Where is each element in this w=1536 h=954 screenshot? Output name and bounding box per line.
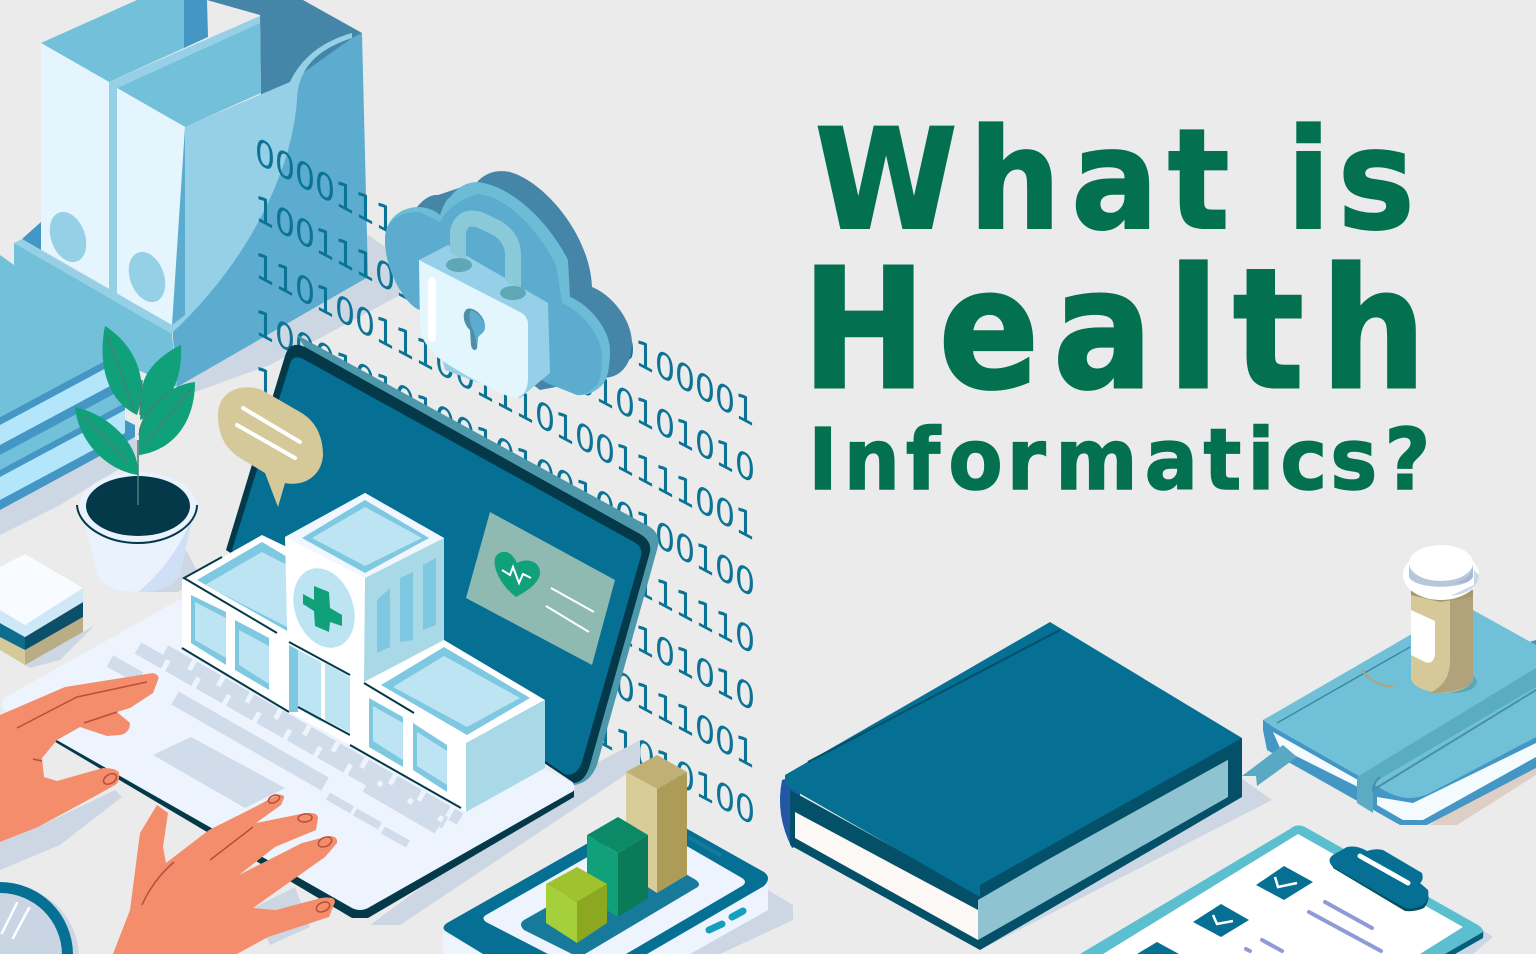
laptop shadow [370,740,640,925]
binary code wall: 1001010100111010010111110 [255,357,755,665]
laptop base [4,597,574,918]
binary code wall: 1001010110100101011010100 [255,528,755,836]
checklist items [1256,866,1313,900]
laptop screen [297,335,658,785]
notebook [1242,610,1536,825]
green bar [587,817,648,917]
shadow under file holder [177,235,400,392]
entrance doors [289,645,298,712]
laptop screen health card [466,512,615,665]
title [802,99,1430,510]
potted plant [75,326,200,592]
keyboard [110,648,460,844]
magnifying glass [0,882,79,954]
hospital building [182,493,545,812]
title line: Health: Health [802,234,1426,427]
center tower [285,493,444,745]
speech bubble [218,387,323,507]
binary code wall: 0000111110101001010100001 [255,129,755,437]
binary code wall: 1101001110011101001111001 [255,243,755,551]
stacked folders on the left edge [0,350,150,535]
padlock [419,218,550,398]
sticky note stack [0,554,95,668]
cloud with padlock [385,171,632,398]
clipboard checklist [1080,825,1493,954]
left wing [182,535,289,712]
binary code wall: 1100101001110100101101010 [255,414,755,722]
pill bottle [1403,545,1479,693]
lime bar [546,867,607,943]
medical cross [303,586,342,632]
binary code wall: 1001110100110111010101010 [255,186,755,494]
title line: What is: What is [815,99,1415,261]
clipboard clip [1330,846,1428,911]
gold bar [626,755,687,893]
notebook shadow [1430,745,1536,825]
right hand [113,793,337,954]
book [780,622,1272,950]
title line: Informatics?: Informatics? [808,411,1430,510]
binary code wall: 1000101010010100100100100 [255,300,755,608]
trackpad [153,737,285,808]
bookmark ribbon [1242,745,1297,786]
tablet buttons [709,911,743,930]
binary code wall: 1010011101001010110111001 [255,471,755,779]
binary code wall [255,129,755,836]
tablet with bar chart [443,755,793,954]
right wing [350,640,545,812]
laptop [2,335,658,925]
left hand [0,673,158,870]
file holder with binders [0,0,368,417]
